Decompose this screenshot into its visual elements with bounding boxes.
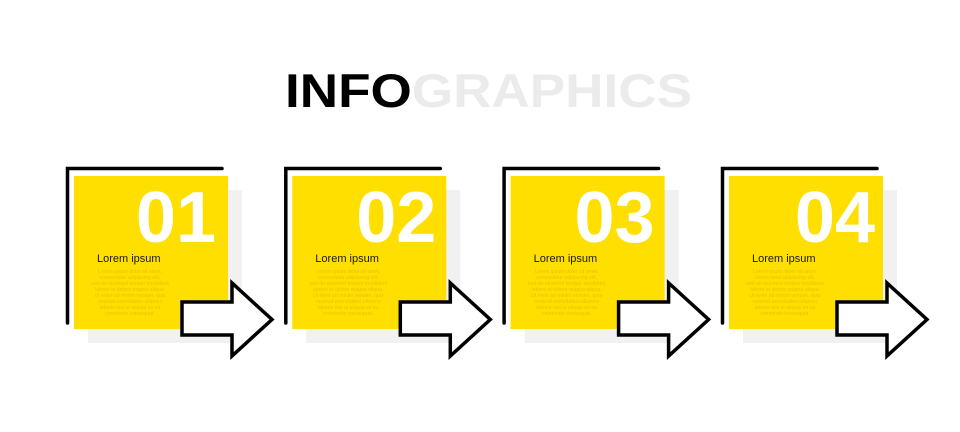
panel: step 04 [722, 168, 927, 356]
heading: Lorem ipsum [534, 253, 597, 265]
body text: Ut enim ad minim veniam, quis [313, 293, 384, 299]
body text: laboris nisi ut aliquip ex ea [318, 305, 379, 311]
body text: commodo consequat. [542, 311, 591, 317]
number: 03 [575, 178, 655, 258]
heading: Lorem ipsum [752, 253, 816, 265]
body text: Lorem ipsum dolor sit amet, [535, 269, 599, 275]
bracket [504, 168, 659, 323]
body text: commodo consequat. [323, 311, 373, 317]
body text: commodo consequat. [760, 311, 810, 317]
body text: consectetur adipiscing elit, [318, 275, 379, 281]
body text: laboris nisi ut aliquip ex ea [536, 305, 597, 311]
body text: consectetur adipiscing elit, [536, 275, 597, 281]
shadow [306, 190, 460, 343]
shadow [743, 190, 897, 343]
body text: laboris nisi ut aliquip ex ea [755, 305, 816, 311]
panel: step 01 [68, 168, 272, 356]
body text: sed do eiusmod tempor incididunt [310, 281, 388, 287]
body text: labore et dolore magna aliqua. [750, 287, 820, 293]
yellow card [292, 176, 446, 329]
body text: commodo consequat. [105, 311, 155, 317]
body text: sed do eiusmod tempor incididunt [528, 281, 606, 287]
bracket [722, 168, 877, 323]
body text: sed do eiusmod tempor incididunt [91, 281, 169, 287]
shadow [525, 190, 679, 343]
bracket [286, 168, 440, 323]
yellow card [74, 176, 228, 329]
panel: step 02 [286, 168, 490, 356]
body text: nostrud exercitation ullamco [316, 299, 381, 305]
number: 02 [356, 178, 436, 258]
body text: labore et dolore magna aliqua. [532, 287, 602, 293]
body text: nostrud exercitation ullamco [534, 299, 599, 305]
body text: Ut enim ad minim veniam, quis [95, 293, 166, 299]
arrow [400, 283, 490, 356]
body text: Lorem ipsum dolor sit amet, [753, 269, 817, 275]
yellow card [511, 176, 665, 329]
number: 01 [136, 178, 216, 258]
heading: Lorem ipsum [315, 253, 379, 265]
body text: consectetur adipiscing elit, [755, 275, 815, 281]
arrow [182, 283, 272, 356]
yellow card [729, 176, 883, 329]
arrow [619, 283, 709, 356]
arrow [837, 283, 927, 356]
number: 04 [795, 178, 875, 258]
body text: Lorem ipsum dolor sit amet, [316, 269, 380, 275]
body text: nostrud exercitation ullamco [98, 299, 162, 305]
body text: laboris nisi ut aliquip ex ea [100, 305, 161, 311]
shadow [88, 190, 242, 343]
bracket [68, 168, 222, 323]
body text: Lorem ipsum dolor sit amet, [98, 269, 162, 275]
heading: Lorem ipsum [97, 253, 161, 265]
body text: consectetur adipiscing elit, [100, 275, 160, 281]
title: INFO GRAPHICS [285, 64, 692, 117]
body text: Ut enim ad minim veniam, quis [531, 293, 602, 299]
panel: step 03 [504, 168, 709, 356]
body text: labore et dolore magna aliqua. [313, 287, 383, 293]
body text: labore et dolore magna aliqua. [95, 287, 165, 293]
body text: sed do eiusmod tempor incididunt [746, 281, 824, 287]
body text: nostrud exercitation ullamco [753, 299, 817, 305]
body text: Ut enim ad minim veniam, quis [750, 293, 821, 299]
